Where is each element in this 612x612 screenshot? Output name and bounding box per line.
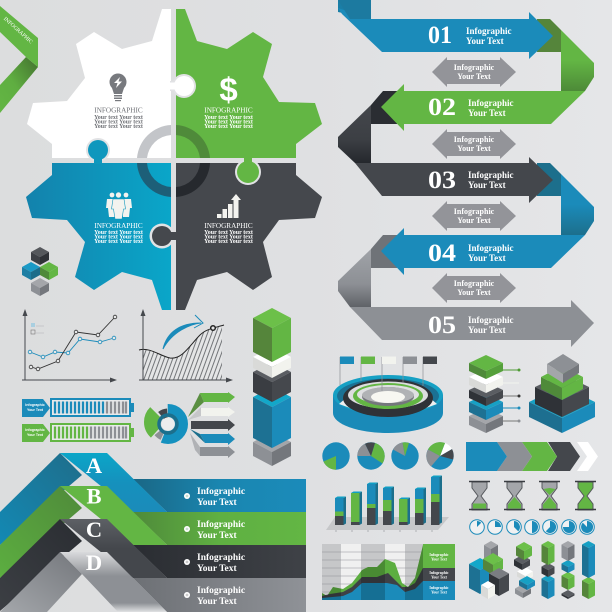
- band C: C: [86, 517, 102, 542]
- arrow 05: Infographic: [468, 315, 514, 325]
- legend panel: Your Text: [431, 558, 448, 562]
- text: white piece: Your text Your text: [94, 124, 143, 130]
- arrow 03: Your Text: [468, 180, 506, 190]
- chart: hatched area chart: [139, 309, 233, 382]
- isometric block cluster: [469, 541, 509, 599]
- double arrow 4: [432, 273, 516, 303]
- icon: rising bars: [217, 194, 241, 218]
- progress clocks: [470, 520, 594, 534]
- gear puzzle: [26, 9, 322, 310]
- pie 3: [391, 442, 419, 470]
- arrow 03: [338, 105, 553, 203]
- icon: four cubes: [22, 247, 58, 296]
- ribbon folds: [338, 0, 561, 268]
- icon: people: [106, 192, 132, 219]
- text: blue piece: INFOGRAPHIC: [94, 222, 143, 230]
- double arrow 4: Your Text: [457, 288, 491, 297]
- double arrow 2: [432, 129, 516, 159]
- hourglass 2: [504, 482, 525, 510]
- text: dark piece: Your text Your text: [204, 230, 253, 236]
- arrow 01: Your Text: [466, 36, 504, 46]
- bars: [335, 476, 442, 525]
- concentric ring chart with flags: [333, 356, 443, 433]
- arrow 05: [338, 249, 594, 347]
- arrow 01: Infographic: [466, 26, 512, 36]
- pie charts: [322, 442, 454, 470]
- text: blue piece: [94, 222, 143, 245]
- 3D stacked bar chart: [326, 476, 449, 532]
- band C: Your Text: [197, 564, 238, 574]
- double arrow 4: Infographic: [454, 279, 495, 288]
- battery: green: Infographic: [25, 428, 45, 432]
- hourglass 1: [469, 482, 490, 510]
- double arrow 2: Your Text: [457, 144, 491, 153]
- layered stack with callout lines: [469, 355, 520, 433]
- block column 2: [514, 542, 535, 598]
- battery: green: [22, 424, 134, 442]
- hourglass icons: [469, 482, 596, 510]
- text: white piece: INFOGRAPHIC: [94, 106, 143, 114]
- text: white piece: Your text Your text: [94, 120, 143, 126]
- text: green piece: Your text Your text: [204, 120, 253, 126]
- icon: light bulb: [110, 74, 126, 101]
- band B: [0, 484, 306, 578]
- battery: blue: [22, 399, 134, 417]
- panel: numbered ribbon flow: [338, 0, 594, 347]
- arrow 03: 03: [428, 167, 456, 194]
- chevron process: [466, 442, 598, 471]
- arrow 02: Infographic: [468, 98, 514, 108]
- text: white piece: [94, 106, 143, 130]
- pie 1: [322, 442, 350, 470]
- band D: [0, 550, 306, 612]
- band A: [0, 453, 306, 545]
- fan arrows: [188, 392, 235, 458]
- arrow 01: 01: [428, 22, 452, 49]
- corner ribbon: [0, 6, 38, 113]
- band C: Infographic: [197, 553, 245, 563]
- legend panel: Your Text: [431, 590, 448, 594]
- band A: A: [86, 453, 103, 478]
- double arrow 1: [432, 57, 516, 87]
- arrow 05: 05: [428, 312, 456, 339]
- block column 4: [562, 541, 574, 599]
- double arrow 3: [432, 201, 516, 231]
- band A: Your Text: [197, 498, 238, 508]
- double arrow 3: Your Text: [457, 216, 491, 225]
- band D: Your Text: [197, 597, 238, 607]
- arrow 01: [338, 0, 553, 59]
- text: green piece: [204, 106, 253, 130]
- arrow 04: Infographic: [468, 243, 514, 253]
- arrow 03: Infographic: [468, 170, 514, 180]
- legend panel: [423, 544, 455, 600]
- legend panel: Your Text: [431, 576, 448, 580]
- legend panel: Infographic: [429, 586, 449, 590]
- text: green piece: Your text Your text: [204, 115, 253, 121]
- arrow 04: Your Text: [468, 253, 506, 263]
- flags: [340, 356, 437, 391]
- pie 2: [357, 442, 385, 470]
- hourglass 4: [575, 482, 596, 510]
- chart: line chart: [22, 309, 117, 382]
- battery: blue: Your Text: [27, 408, 44, 412]
- double arrow 3: Infographic: [454, 207, 495, 216]
- arrow 02: [381, 30, 594, 131]
- legend panel: Infographic: [429, 553, 449, 557]
- hourglass 3: [539, 482, 560, 510]
- battery: green: Your Text: [27, 433, 44, 437]
- text: dark piece: INFOGRAPHIC: [204, 222, 253, 230]
- double arrow 2: Infographic: [454, 135, 495, 144]
- arrow 02: 02: [428, 94, 456, 121]
- block column 3: [542, 541, 554, 599]
- panel: white gear piece: [27, 9, 171, 158]
- band D: D: [86, 550, 102, 575]
- stacked area chart: [322, 544, 455, 600]
- panel: A B C D chevrons: [0, 453, 306, 612]
- text: blue piece: Your text Your text: [94, 230, 143, 236]
- band A: Infographic: [197, 487, 245, 497]
- corner ribbon: INFOGRAPHIC: [2, 16, 34, 46]
- panel: blue gear piece: [26, 138, 174, 310]
- text: dark piece: [204, 222, 253, 245]
- text: white piece: Your text Your text: [94, 115, 143, 121]
- donut with fan arrows: [151, 392, 235, 458]
- double arrow 1: Infographic: [454, 63, 495, 72]
- arrow 04: 04: [428, 240, 457, 267]
- text: green piece: Your text Your text: [204, 124, 253, 130]
- text: dark piece: Your text Your text: [204, 234, 253, 240]
- panel: green gear piece: [170, 9, 322, 158]
- band B: B: [86, 484, 102, 508]
- battery: blue: Infographic: [25, 403, 45, 407]
- isometric stack column: [253, 308, 291, 466]
- arrow 04: [381, 174, 594, 275]
- legend panel: Infographic: [429, 571, 449, 575]
- block column 5: [582, 541, 595, 599]
- double arrow 1: Your Text: [457, 72, 491, 81]
- band D: Infographic: [197, 586, 245, 596]
- isometric pyramid: [529, 354, 595, 433]
- band C: [0, 517, 306, 611]
- band B: Infographic: [197, 520, 245, 530]
- panel: dark gear piece: [152, 156, 322, 310]
- text: blue piece: Your text Your text: [94, 234, 143, 240]
- text: green piece: INFOGRAPHIC: [204, 106, 253, 114]
- arrow 05: Your Text: [468, 325, 506, 335]
- text: blue piece: Your text Your text: [94, 239, 143, 245]
- band B: Your Text: [197, 531, 238, 541]
- arrow 02: Your Text: [468, 108, 506, 118]
- pie 4: [426, 442, 454, 470]
- icon: dollar: $: [219, 71, 238, 108]
- text: dark piece: Your text Your text: [204, 239, 253, 245]
